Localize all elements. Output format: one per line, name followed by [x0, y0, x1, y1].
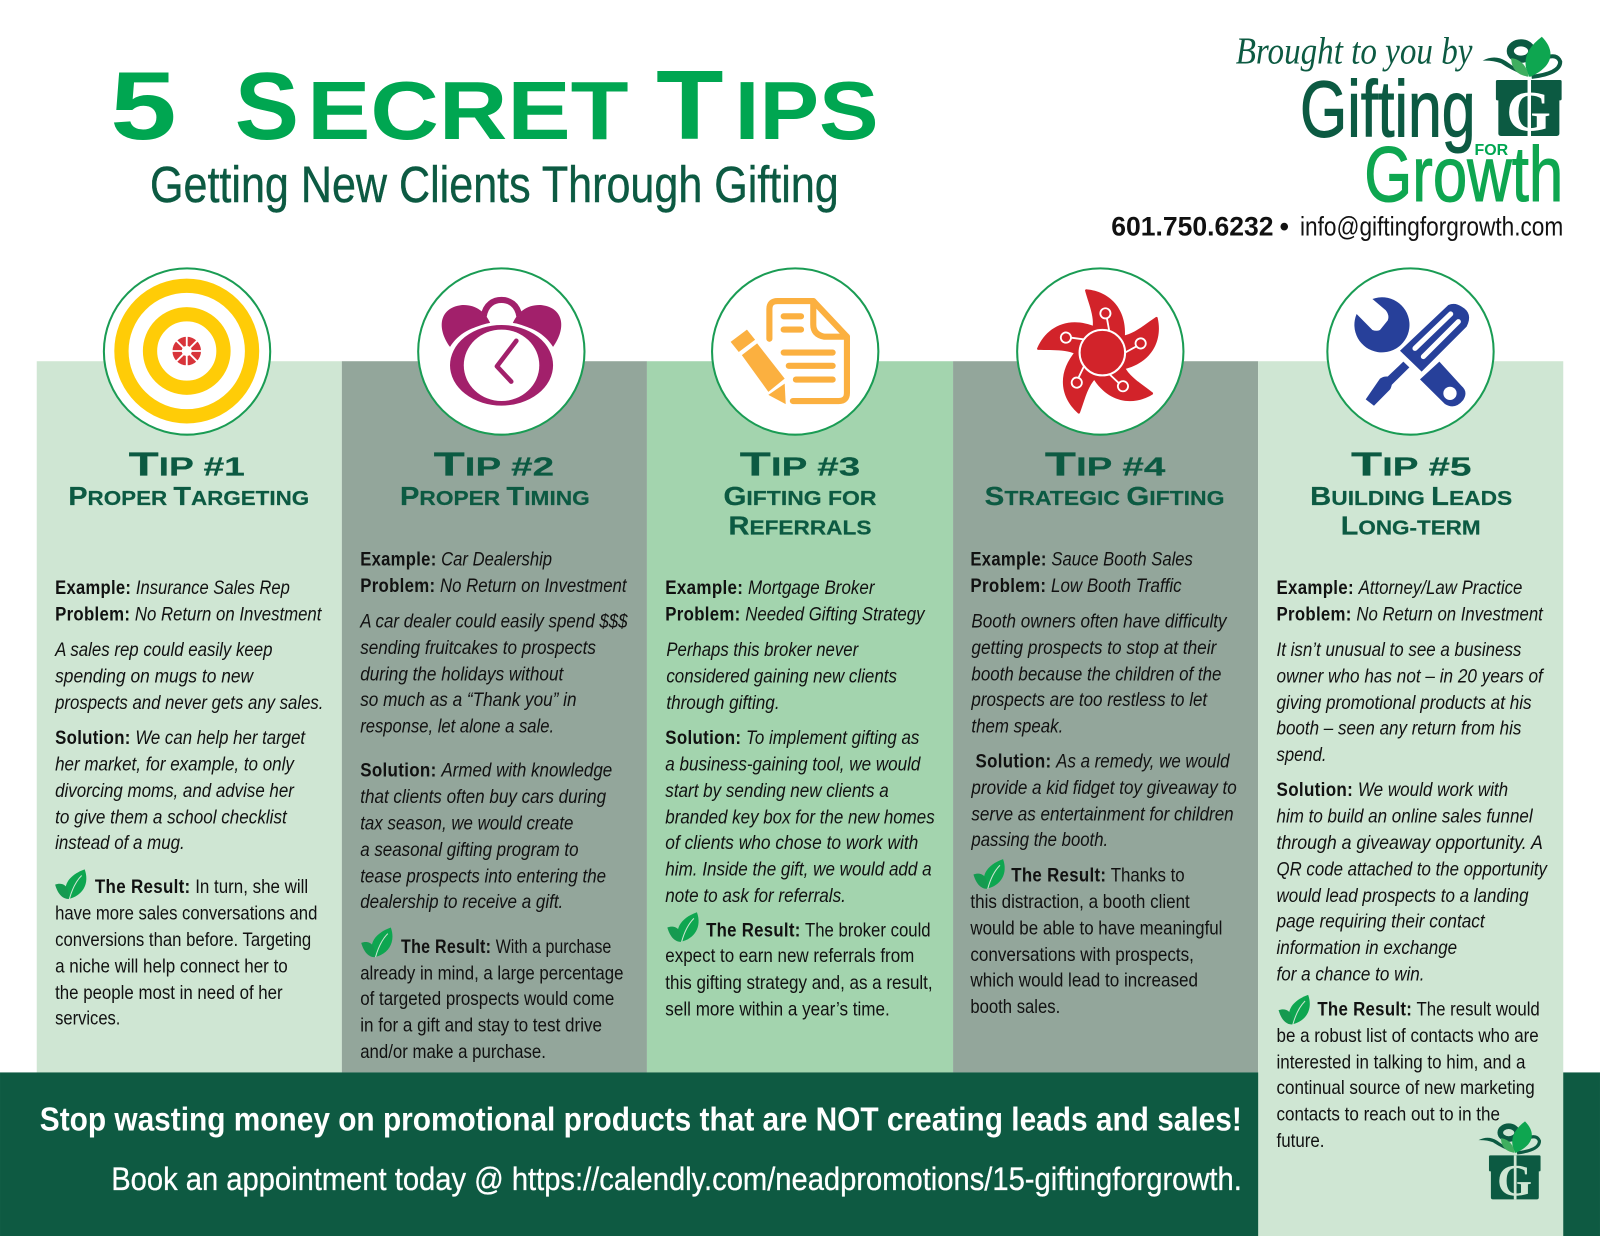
text block: tip 3 [665, 577, 935, 1020]
text block: tip 1: A sales rep could easily keep [54, 639, 273, 661]
subheading: proper targeting: PROPER TARGETING [68, 483, 309, 511]
title: IPS [735, 64, 879, 157]
text block: tip 3: Example: Mortgage Broker [665, 577, 876, 599]
text block: tip 2: so much as a “Thank you” in [360, 689, 577, 711]
heading: tip 1: T IP #1 [129, 447, 245, 484]
text block: tip 3: considered gaining new clients [666, 666, 897, 688]
text block: tip 3: expect to earn new referrals from [665, 945, 914, 967]
text block: tip 3: note to ask for referrals. [665, 885, 846, 907]
text block: tip 4: booth because the children of the [971, 664, 1222, 686]
icon: target [104, 268, 270, 435]
text block: tip 1: to give them a school checklist [55, 806, 288, 828]
contact line [1111, 212, 1563, 242]
subheading: gifting for referrals [723, 483, 877, 541]
icon: gift logo [1483, 37, 1562, 144]
text block: tip 5: continual source of new marketing [1277, 1077, 1535, 1099]
text block: tip 2 [359, 548, 629, 1063]
text block: tip 1: her market, for example, to only [55, 753, 295, 775]
text block: tip 3: him. Inside the gift, we would add a [665, 858, 932, 880]
panel: tip 5 [1258, 268, 1563, 1236]
text block: tip 5: Example: Attorney/Law Practice [1277, 577, 1523, 599]
bottom call-to-action band [0, 1072, 1600, 1236]
text block: tip 5: future. [1277, 1130, 1324, 1152]
text block: tip 1: prospects and never gets any sales. [54, 692, 323, 714]
subheading: gifting for referrals: GIFTING FOR [723, 483, 877, 511]
text block: tip 1: services. [55, 1007, 120, 1029]
brought to you by: Brought to you by [1236, 30, 1473, 72]
contact line: • [1280, 212, 1289, 242]
contact line: 601.750.6232 [1111, 212, 1273, 242]
text block: tip 3: of clients who chose to work with [665, 832, 918, 854]
text block: tip 5: him to build an online sales funnel [1277, 805, 1533, 827]
cta headline: Stop wasting money on promotional products that are NOT creating leads and sales! [40, 1102, 1242, 1139]
text block: tip 5: page requiring their contact [1276, 911, 1486, 933]
title: ECRET [307, 64, 629, 157]
heading: tip 3: T IP #3 [740, 447, 860, 484]
icon: leaf [973, 859, 1005, 889]
text block: tip 3: Perhaps this broker never [666, 639, 859, 661]
heading: tip 2: T IP #2 [434, 447, 554, 484]
text block: tip 3: a business-gaining tool, we would [665, 753, 921, 775]
icon: leaf [361, 928, 392, 957]
text block: tip 5 [1276, 577, 1548, 1152]
subheading: building leads long-term: LONG-TERM [1341, 513, 1481, 541]
icon: gift logo: G [1506, 81, 1551, 144]
text block: tip 2: tease prospects into entering the [360, 866, 606, 888]
icon: document and pencil [712, 268, 878, 435]
text block: tip 4: Example: Sauce Booth Sales [970, 548, 1193, 570]
text block: tip 5: booth – seen any return from his [1277, 718, 1522, 740]
text block: tip 1: Solution: We can help her target [55, 727, 306, 749]
icon: leaf [1279, 995, 1310, 1024]
text block: tip 2: a seasonal gifting program to [360, 839, 579, 861]
text block: tip 5: would lead prospects to a landing [1277, 885, 1529, 907]
text block: tip 4: Problem: Low Booth Traffic [970, 575, 1182, 597]
text block: tip 4: which would lead to increased [970, 970, 1198, 992]
text block: tip 1: conversions than before. Targeting [55, 929, 311, 951]
text block: tip 4: Booth owners often have difficulty [971, 611, 1228, 633]
text block: tip 5: contacts to reach out to in the [1277, 1103, 1500, 1125]
text block: tip 4: this distraction, a booth client [970, 891, 1190, 913]
text block: tip 4: conversations with prospects, [970, 944, 1194, 966]
text block: tip 2: Example: Car Dealership [360, 548, 552, 570]
wordmark Gifting: Gifting [1300, 65, 1475, 154]
text block: tip 1: divorcing moms, and advise her [55, 780, 295, 802]
text block: tip 4: booth sales. [970, 996, 1060, 1018]
text block: tip 1: have more sales conversations and [55, 902, 317, 924]
text block: tip 2: sending fruitcakes to prospects [360, 637, 596, 659]
text block: tip 3: this gifting strategy and, as a result, [665, 972, 933, 994]
text block: tip 5: It isn’t unusual to see a business [1277, 639, 1522, 661]
title: T [656, 50, 723, 160]
cta booking link: Book an appointment today @ https://calendly.com/neadpromotions/15-giftingforgrowth. [111, 1160, 1242, 1197]
text block: tip 5: giving promotional products at his [1277, 692, 1532, 714]
panel: tip 1 [37, 268, 342, 1072]
subheading: building leads long-term: BUILDING LEADS [1310, 483, 1512, 511]
text block: tip 3: branded key box for the new homes [665, 806, 935, 828]
contact line: info@giftingforgrowth.com [1300, 212, 1563, 242]
icon: leaf [667, 912, 699, 942]
text block: tip 5: be a robust list of contacts who are [1277, 1025, 1539, 1047]
subheading: gifting for referrals: REFERRALS [729, 513, 871, 541]
text block: tip 3: Problem: Needed Gifting Strategy [665, 603, 926, 625]
text block: tip 3: through gifting. [666, 692, 780, 714]
text block: tip 5: information in exchange [1277, 937, 1457, 959]
text block: tip 4: provide a kid fidget toy giveaway to [971, 777, 1237, 799]
heading: tip 5: T IP #5 [1351, 447, 1471, 484]
wordmark for: FOR [1474, 142, 1508, 159]
text block: tip 1: spending on mugs to new [55, 666, 255, 688]
text block: tip 1: instead of a mug. [55, 832, 185, 854]
text block: tip 2: A car dealer could easily spend $$$ [359, 611, 629, 633]
brand logo block [1111, 30, 1563, 242]
panel: tip 3 [647, 268, 953, 1072]
text block: tip 5: The Result: The result would [1317, 998, 1540, 1020]
text block: tip 2: during the holidays without [360, 664, 565, 686]
text block: tip 2: that clients often buy cars during [360, 786, 606, 808]
text block: tip 2: Problem: No Return on Investment [360, 575, 628, 597]
title: S [235, 53, 299, 160]
text block: tip 5: for a chance to win. [1277, 964, 1424, 986]
icon: wrench and screwdriver [1327, 268, 1494, 435]
text block: tip 5: Problem: No Return on Investment [1277, 603, 1544, 625]
text block: tip 1: Problem: No Return on Investment [55, 603, 323, 625]
icon: flower network [1017, 268, 1183, 435]
text block: tip 5: QR code attached to the opportunity [1277, 858, 1548, 880]
text block: tip 4: passing the booth. [971, 829, 1108, 851]
text block: tip 4: The Result: Thanks to [1011, 865, 1185, 887]
subheading: building leads long-term [1310, 483, 1512, 541]
text block: tip 4: Solution: As a remedy, we would [976, 750, 1231, 772]
text block: tip 4: getting prospects to stop at their [971, 637, 1218, 659]
text block: tip 4 [970, 548, 1237, 1018]
text block: tip 2: already in mind, a large percentage [360, 963, 624, 985]
text block: tip 1: The Result: In turn, she will [95, 876, 308, 898]
text block: tip 4: would be able to have meaningful [970, 918, 1222, 940]
icon: alarm clock [418, 268, 584, 435]
icon: small gift logo [1479, 1121, 1541, 1205]
text block: tip 2: dealership to receive a gift. [360, 891, 563, 913]
text block: tip 3: Solution: To implement gifting as [665, 727, 920, 749]
text block: tip 2: and/or make a purchase. [360, 1041, 546, 1063]
subheading: strategic gifting: STRATEGIC GIFTING [985, 483, 1224, 511]
text block: tip 4: them speak. [971, 716, 1063, 738]
text block: tip 4: serve as entertainment for children [971, 803, 1234, 825]
text block: tip 2: Solution: Armed with knowledge [360, 760, 612, 782]
subtitle: Getting New Clients Through Gifting [150, 156, 839, 213]
subheading: proper timing: PROPER TIMING [400, 483, 590, 511]
text block: tip 2: The Result: With a purchase [401, 936, 611, 958]
text block: tip 4: prospects are too restless to let [971, 689, 1208, 711]
text block: tip 2: response, let alone a sale. [360, 716, 554, 738]
icon: small gift logo: G [1497, 1155, 1532, 1205]
text block: tip 2: in for a gift and stay to test drive [360, 1015, 602, 1037]
text block: tip 5: Solution: We would work with [1277, 779, 1508, 801]
text block: tip 2: tax season, we would create [360, 813, 574, 835]
icon: leaf [55, 869, 86, 899]
text block: tip 1: the people most in need of her [55, 982, 283, 1004]
text block: tip 5: interested in talking to him, and a [1277, 1051, 1526, 1073]
text block: tip 3: sell more within a year’s time. [665, 998, 890, 1020]
panel: tip 2 [342, 268, 647, 1072]
text block: tip 2: of targeted prospects would come [360, 988, 614, 1010]
text block: tip 5: through a giveaway opportunity. A [1277, 832, 1543, 854]
heading: tip 4: T IP #4 [1045, 447, 1167, 484]
text block: tip 1 [54, 577, 323, 1029]
panel: tip 4 [953, 268, 1258, 1072]
text block: tip 5: owner who has not – in 20 years of [1277, 666, 1545, 688]
title: 5 [110, 51, 177, 160]
text block: tip 3: The Result: The broker could [706, 920, 931, 942]
text block: tip 1: Example: Insurance Sales Rep [55, 577, 290, 599]
text block: tip 1: a niche will help connect her to [55, 955, 288, 977]
text block: tip 5: spend. [1277, 744, 1327, 766]
text block: tip 3: start by sending new clients a [665, 780, 889, 802]
